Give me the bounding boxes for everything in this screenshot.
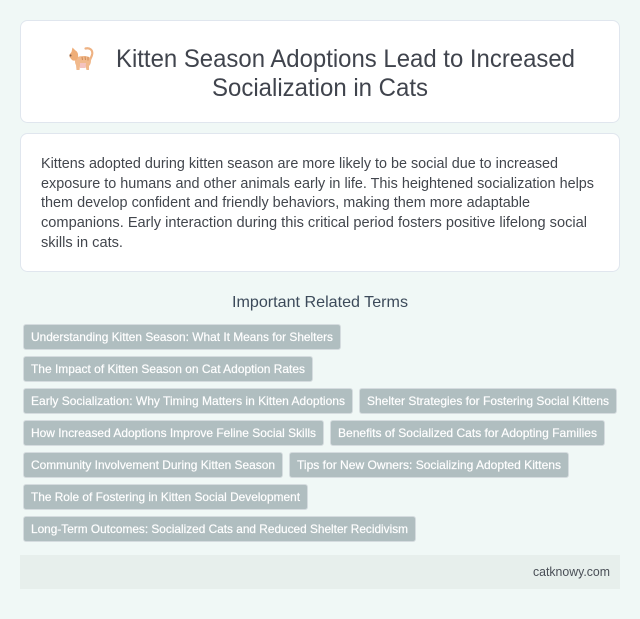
tag bbox=[24, 484, 308, 510]
summary text: Kittens adopted during kitten season are more likely to be social due to increased bbox=[41, 156, 558, 172]
tag: The Role of Fostering in Kitten Social Development bbox=[31, 490, 301, 504]
tag bbox=[290, 452, 568, 478]
tag bbox=[24, 420, 324, 446]
heading: related terms: Important Related Terms bbox=[232, 294, 408, 311]
panel: title card bbox=[20, 20, 620, 122]
tag bbox=[24, 516, 416, 542]
tag: Benefits of Socialized Cats for Adopting Families bbox=[338, 426, 597, 440]
tag: Long-Term Outcomes: Socialized Cats and Reduced Shelter Recidivism bbox=[31, 522, 408, 536]
tag: Community Involvement During Kitten Season bbox=[31, 458, 275, 472]
tag: Tips for New Owners: Socializing Adopted Kittens bbox=[297, 458, 561, 472]
footer source: catknowy.com bbox=[533, 565, 610, 579]
panel: summary bbox=[20, 134, 620, 272]
tag: Shelter Strategies for Fostering Social Kittens bbox=[367, 394, 609, 408]
icon: cat bbox=[70, 48, 92, 70]
tag: How Increased Adoptions Improve Feline Social Skills bbox=[31, 426, 316, 440]
tags: related terms bbox=[24, 324, 616, 542]
tag bbox=[330, 420, 604, 446]
title: Kitten Season Adoptions Lead to Increased bbox=[116, 45, 575, 73]
summary text: skills in cats. bbox=[41, 235, 123, 251]
tag: Understanding Kitten Season: What It Means for Shelters bbox=[31, 330, 333, 344]
tag: Early Socialization: Why Timing Matters in Kitten Adoptions bbox=[31, 394, 345, 408]
summary text: them develop confident and friendly behaviors, making them more adaptable bbox=[41, 195, 530, 211]
footer bbox=[20, 555, 620, 589]
summary text bbox=[41, 156, 594, 251]
tag: The Impact of Kitten Season on Cat Adoption Rates bbox=[31, 362, 305, 376]
tag bbox=[360, 388, 616, 414]
tag bbox=[24, 388, 352, 414]
title: Socialization in Cats bbox=[212, 74, 428, 102]
summary text: companions. Early interaction during this critical period fosters positive lifelong social bbox=[41, 215, 587, 231]
summary text: exposure to humans and other animals early in life. This heightened socialization helps bbox=[41, 176, 594, 192]
tag bbox=[24, 452, 282, 478]
tag bbox=[24, 356, 312, 382]
tag bbox=[24, 324, 340, 350]
title bbox=[116, 45, 575, 102]
